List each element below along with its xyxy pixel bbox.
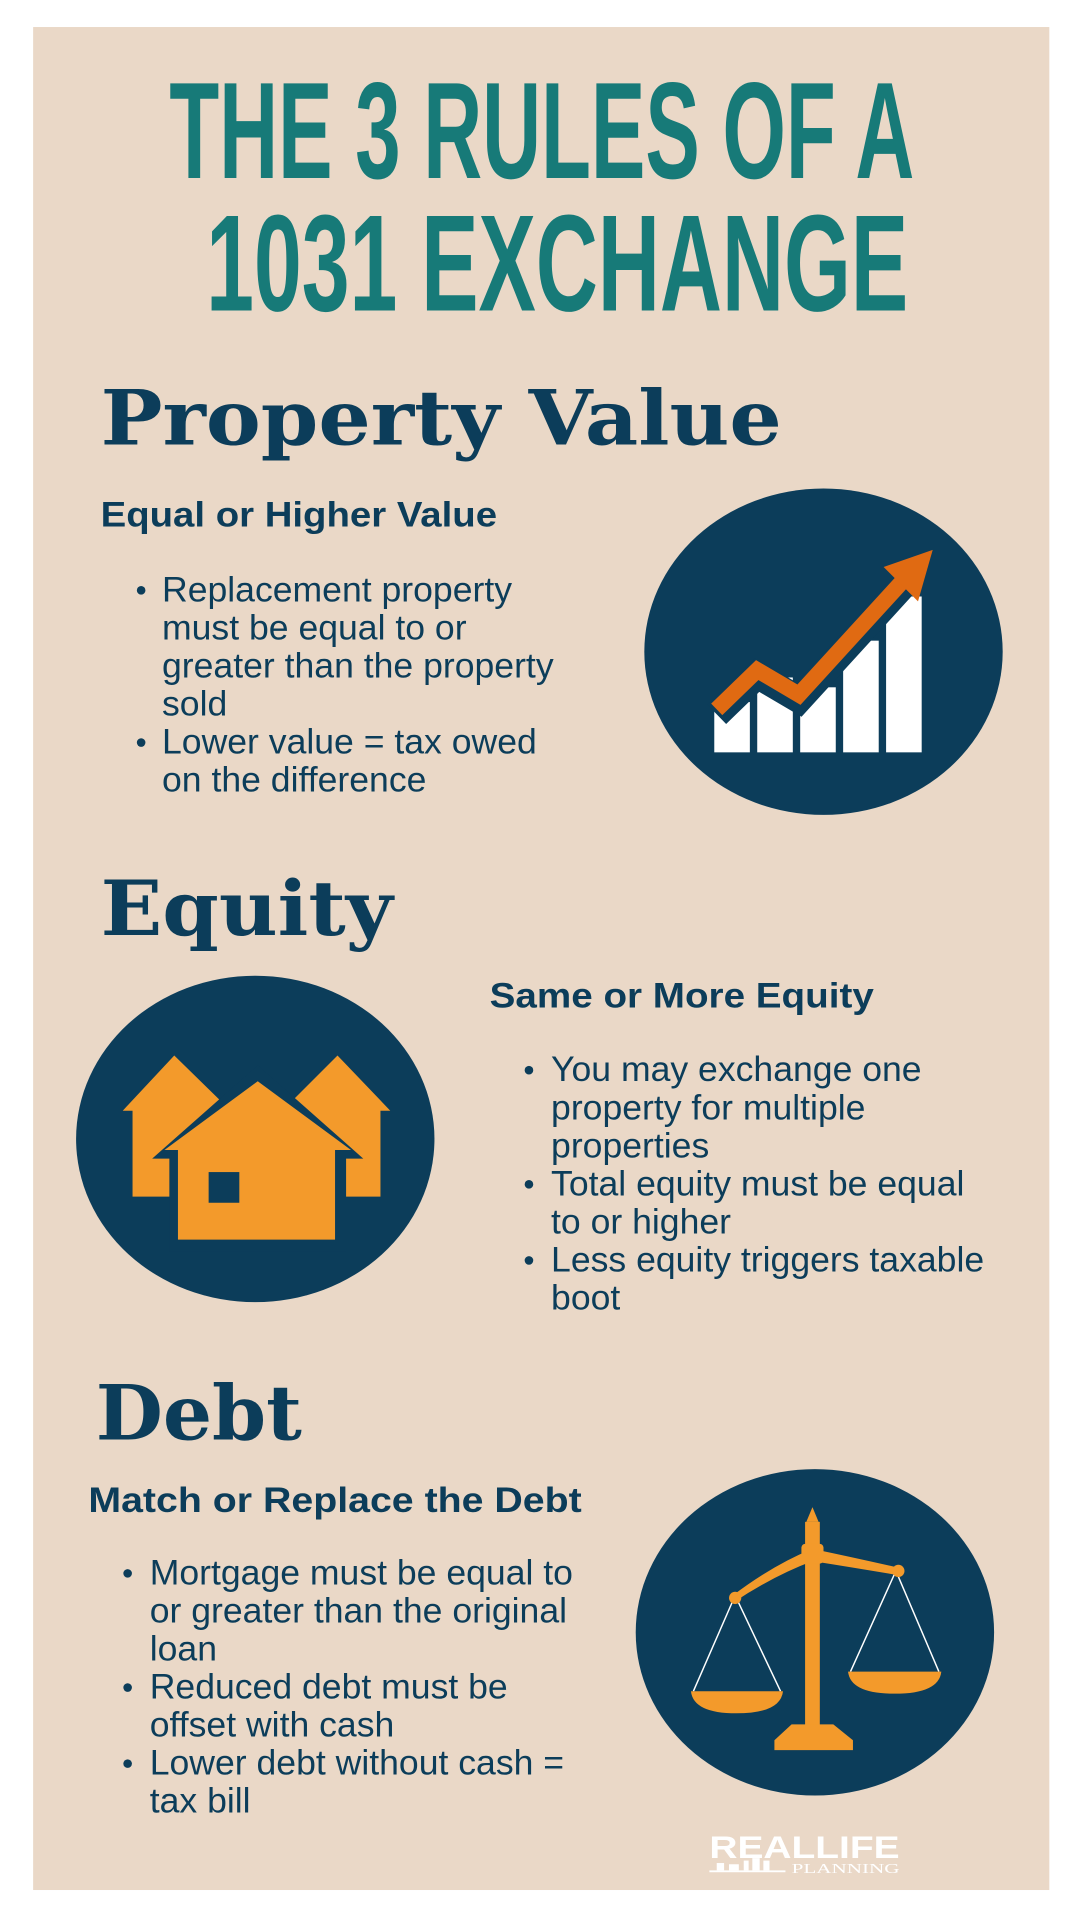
bullets: debt: Lower debt without cash =: [150, 1743, 564, 1783]
icon: houses: [76, 976, 434, 1302]
bullets: property value: Lower value = tax owed: [162, 722, 537, 762]
bullets: debt: [123, 1552, 573, 1821]
icon: scale: [636, 1469, 994, 1796]
bullets: property value: on the difference: [162, 760, 426, 800]
bullets: property value: [137, 569, 554, 800]
logo: REALLIFE: [709, 1829, 900, 1865]
bullets: debt: Mortgage must be equal to: [150, 1552, 573, 1592]
subheading: Equal or Higher Value: Equal or Higher Value: [101, 495, 497, 535]
icon: growth chart: [644, 488, 1003, 815]
heading: Property Value: Property Value: [101, 373, 782, 462]
subheading: Same or More Equity: Same or More Equity: [490, 976, 874, 1016]
bullets: property value: Replacement property: [162, 569, 512, 609]
bullets: property value: sold: [162, 684, 227, 724]
logo: [709, 1829, 900, 1876]
bullets: property value: must be equal to or: [162, 607, 467, 647]
heading: Equity: Equity: [101, 864, 396, 953]
bullets: debt: Reduced debt must be: [150, 1667, 508, 1707]
heading: Debt: Debt: [96, 1369, 302, 1458]
logo: PLANNING: [792, 1861, 900, 1876]
bullets: equity: Less equity triggers taxable: [551, 1239, 984, 1279]
bullets: equity: You may exchange one: [551, 1049, 922, 1089]
bullets: property value: greater than the property: [162, 645, 554, 685]
title: [169, 55, 914, 341]
bullets: equity: to or higher: [551, 1201, 731, 1241]
bullets: equity: property for multiple: [551, 1087, 865, 1127]
bullets: equity: properties: [551, 1125, 709, 1165]
bullets: equity: boot: [551, 1278, 620, 1318]
bullets: equity: Total equity must be equal: [551, 1163, 964, 1203]
bullets: equity: [525, 1049, 984, 1318]
subheading: Match or Replace the Debt: Match or Replace the Debt: [88, 1480, 582, 1520]
bullets: debt: offset with cash: [150, 1705, 394, 1745]
bullets: debt: loan: [150, 1629, 217, 1669]
bullets: debt: tax bill: [150, 1781, 251, 1821]
bullets: debt: or greater than the original: [150, 1590, 567, 1630]
